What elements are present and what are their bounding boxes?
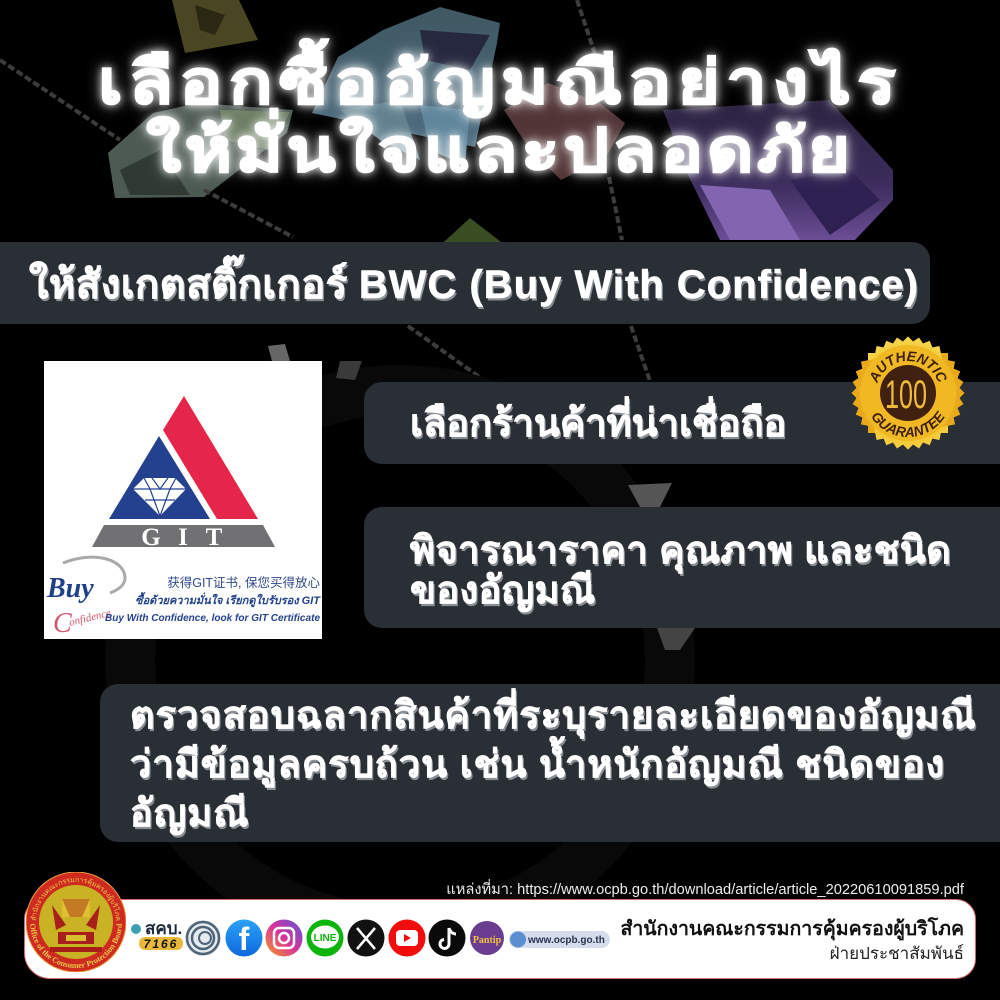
icon: authentic guarantee badge: GUARANTEE bbox=[872, 410, 944, 438]
GIT certificate image: GIT bbox=[141, 524, 223, 551]
footer organisation name: สำนักงานคณะกรรมการคุ้มครองผู้บริโภค bbox=[620, 918, 964, 940]
icon: authentic guarantee badge bbox=[852, 336, 964, 450]
GIT certificate image bbox=[44, 361, 322, 639]
panel: check product label: ว่ามีข้อมูลครบถ้วน เช่น น้ำหนักอัญมณี ชนิดของ bbox=[130, 744, 945, 786]
GIT certificate image: C bbox=[53, 608, 72, 639]
panel: check product label bbox=[100, 684, 1000, 842]
icon: LINE: LINE bbox=[314, 933, 337, 944]
GIT certificate image: Buy bbox=[46, 573, 94, 604]
title: เลือกซื้ออัญมณีอย่างไร bbox=[98, 49, 902, 116]
icon: OCPB bbox=[185, 920, 221, 956]
social icons row bbox=[185, 920, 610, 957]
hotline logo: 7166 bbox=[144, 937, 178, 951]
footer department: ฝ่ายประชาสัมพันธ์ bbox=[830, 944, 964, 963]
source citation: แหล่งที่มา: https://www.ocpb.go.th/download/article/article_20220610091859.pdf bbox=[446, 882, 964, 898]
icon: X bbox=[348, 920, 384, 956]
panel: choose trusted shop bbox=[364, 382, 1000, 464]
icon: Pantip bbox=[470, 921, 504, 955]
icon: TikTok bbox=[428, 920, 466, 956]
GIT certificate image: onfidence bbox=[68, 607, 112, 629]
panel: consider price and quality bbox=[364, 507, 1000, 628]
panel: BWC sticker heading bbox=[0, 242, 930, 324]
panel: BWC sticker heading: ให้สังเกตสติ๊กเกอร์ BWC (Buy With Confidence) bbox=[29, 263, 919, 307]
panel: consider price and quality: ของอัญมณี bbox=[410, 570, 596, 612]
icon: authentic guarantee badge: 100 bbox=[885, 373, 927, 417]
footer bar bbox=[24, 899, 976, 979]
seal: Office of the Consumer Protection Board bbox=[26, 872, 126, 972]
icon: Pantip: Pantip bbox=[473, 935, 502, 946]
hotline logo: สคบ. bbox=[145, 919, 182, 938]
GIT certificate image: Buy With Confidence, look for GIT Certificate bbox=[105, 613, 320, 624]
icon: LINE bbox=[306, 920, 344, 956]
seal: Office of the Consumer Protection Board: สำนักงานคณะกรรมการคุ้มครองผู้บริโภค bbox=[30, 878, 120, 920]
seal: Office of the Consumer Protection Board: Office of the Consumer Protection Board bbox=[30, 924, 122, 968]
panel: consider price and quality: พิจารณาราคา คุณภาพ และชนิด bbox=[410, 530, 951, 572]
panel: choose trusted shop: เลือกร้านค้าที่น่าเชื่อถือ bbox=[410, 403, 786, 445]
icon: Facebook: f bbox=[239, 921, 250, 957]
GIT certificate image: ซื้อด้วยความมั่นใจ เรียกดูใบรับรอง GIT bbox=[135, 592, 321, 608]
icon: YouTube bbox=[388, 920, 426, 956]
panel: check product label: อัญมณี bbox=[130, 793, 250, 835]
website pill: www.ocpb.go.th bbox=[527, 935, 605, 946]
icon: Instagram bbox=[266, 920, 302, 956]
icon: authentic guarantee badge: AUTHENTIC bbox=[870, 351, 946, 384]
title: ให้มั่นใจและปลอดภัย bbox=[146, 117, 854, 184]
icon: Facebook bbox=[226, 920, 262, 957]
website pill bbox=[509, 931, 610, 948]
GIT certificate image: 获得GIT证书, 保您买得放心 bbox=[167, 575, 320, 590]
hotline logo bbox=[131, 919, 183, 951]
panel: check product label: ตรวจสอบฉลากสินค้าที่ระบุรายละเอียดของอัญมณี bbox=[130, 695, 977, 737]
title bbox=[90, 28, 903, 184]
